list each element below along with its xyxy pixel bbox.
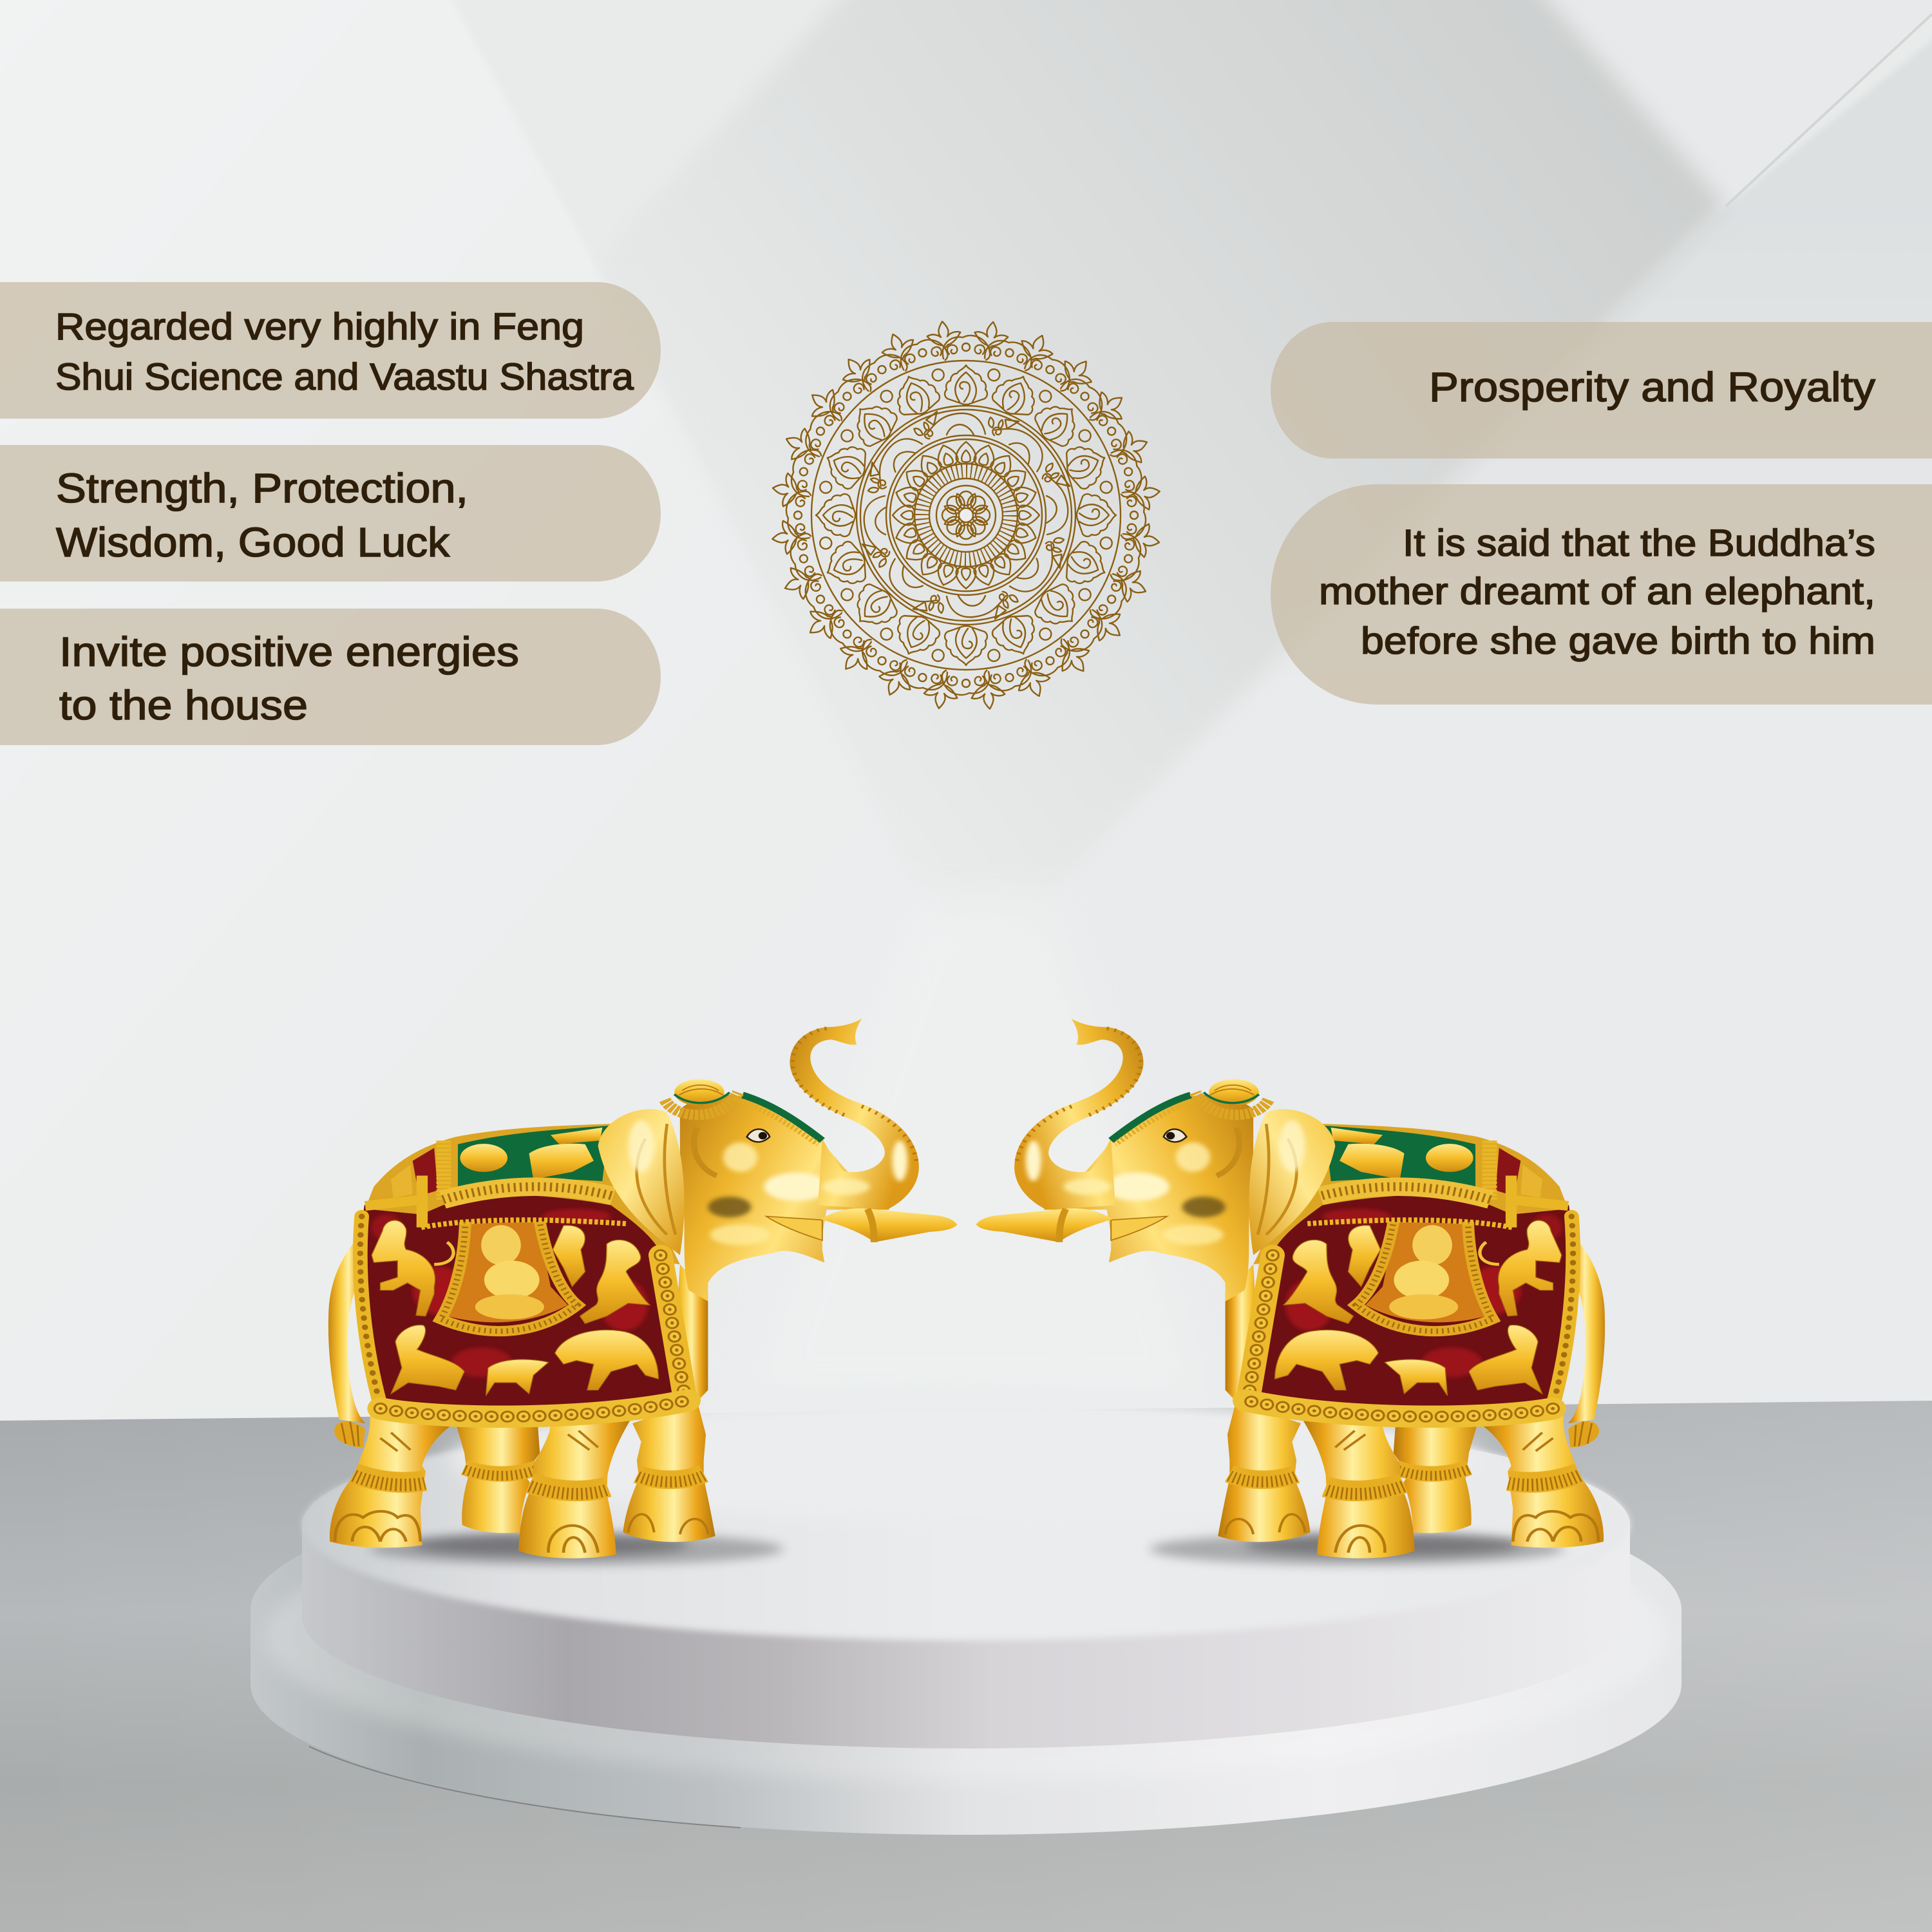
central seated figure (440, 1222, 577, 1331)
foot shadow (370, 1533, 784, 1566)
text pill: buddha: before she gave birth to him (1361, 620, 1875, 662)
animal reliefs (372, 1220, 658, 1396)
text pill: strength: Strength, Protection, (56, 465, 468, 511)
ear (598, 1109, 717, 1255)
near front leg (518, 1417, 632, 1558)
tusk (820, 1208, 957, 1242)
forehead band and crown (665, 1079, 822, 1144)
text pill: strength (0, 445, 661, 582)
text pill: prosperity (1271, 322, 1932, 459)
text pill: positive energies (0, 609, 661, 745)
text pill: positive energies: to the house (59, 682, 308, 728)
text pill: buddha: mother dreamt of an elephant, (1319, 571, 1875, 612)
mandala ornament (766, 315, 1166, 715)
background wall (0, 0, 1932, 1436)
head (665, 1019, 957, 1302)
eye (747, 1129, 770, 1142)
body under cloth (365, 1124, 680, 1264)
right gold elephant (mirrored) (976, 1019, 1605, 1566)
podium (251, 1397, 1681, 1835)
saddle cloth with green panel (365, 1124, 613, 1227)
near rear leg (330, 1412, 451, 1548)
trunk (790, 1019, 919, 1209)
far legs (456, 1401, 715, 1542)
text pill: buddha (1271, 484, 1932, 705)
text pill: prosperity: Prosperity and Royalty (1429, 364, 1875, 410)
text pill: feng shui: Regarded very highly in Feng (55, 306, 584, 348)
tail (328, 1235, 365, 1447)
top surface blend into wall (451, 1397, 1481, 1520)
chest behind blanket (671, 1264, 708, 1408)
text pill: buddha: It is said that the Buddha’s (1403, 522, 1875, 564)
text pill: positive energies: Invite positive energies (59, 629, 519, 675)
blanket gold borders (360, 1217, 688, 1417)
floor (0, 1401, 1932, 1932)
text pill: feng shui (0, 282, 661, 419)
soft back glow of disc (477, 1404, 1301, 1546)
left gold elephant (328, 1019, 957, 1566)
text pill: feng shui: Shui Science and Vaastu Shastra (55, 356, 634, 398)
red blanket (360, 1194, 688, 1417)
text pill: strength: Wisdom, Good Luck (56, 519, 450, 565)
